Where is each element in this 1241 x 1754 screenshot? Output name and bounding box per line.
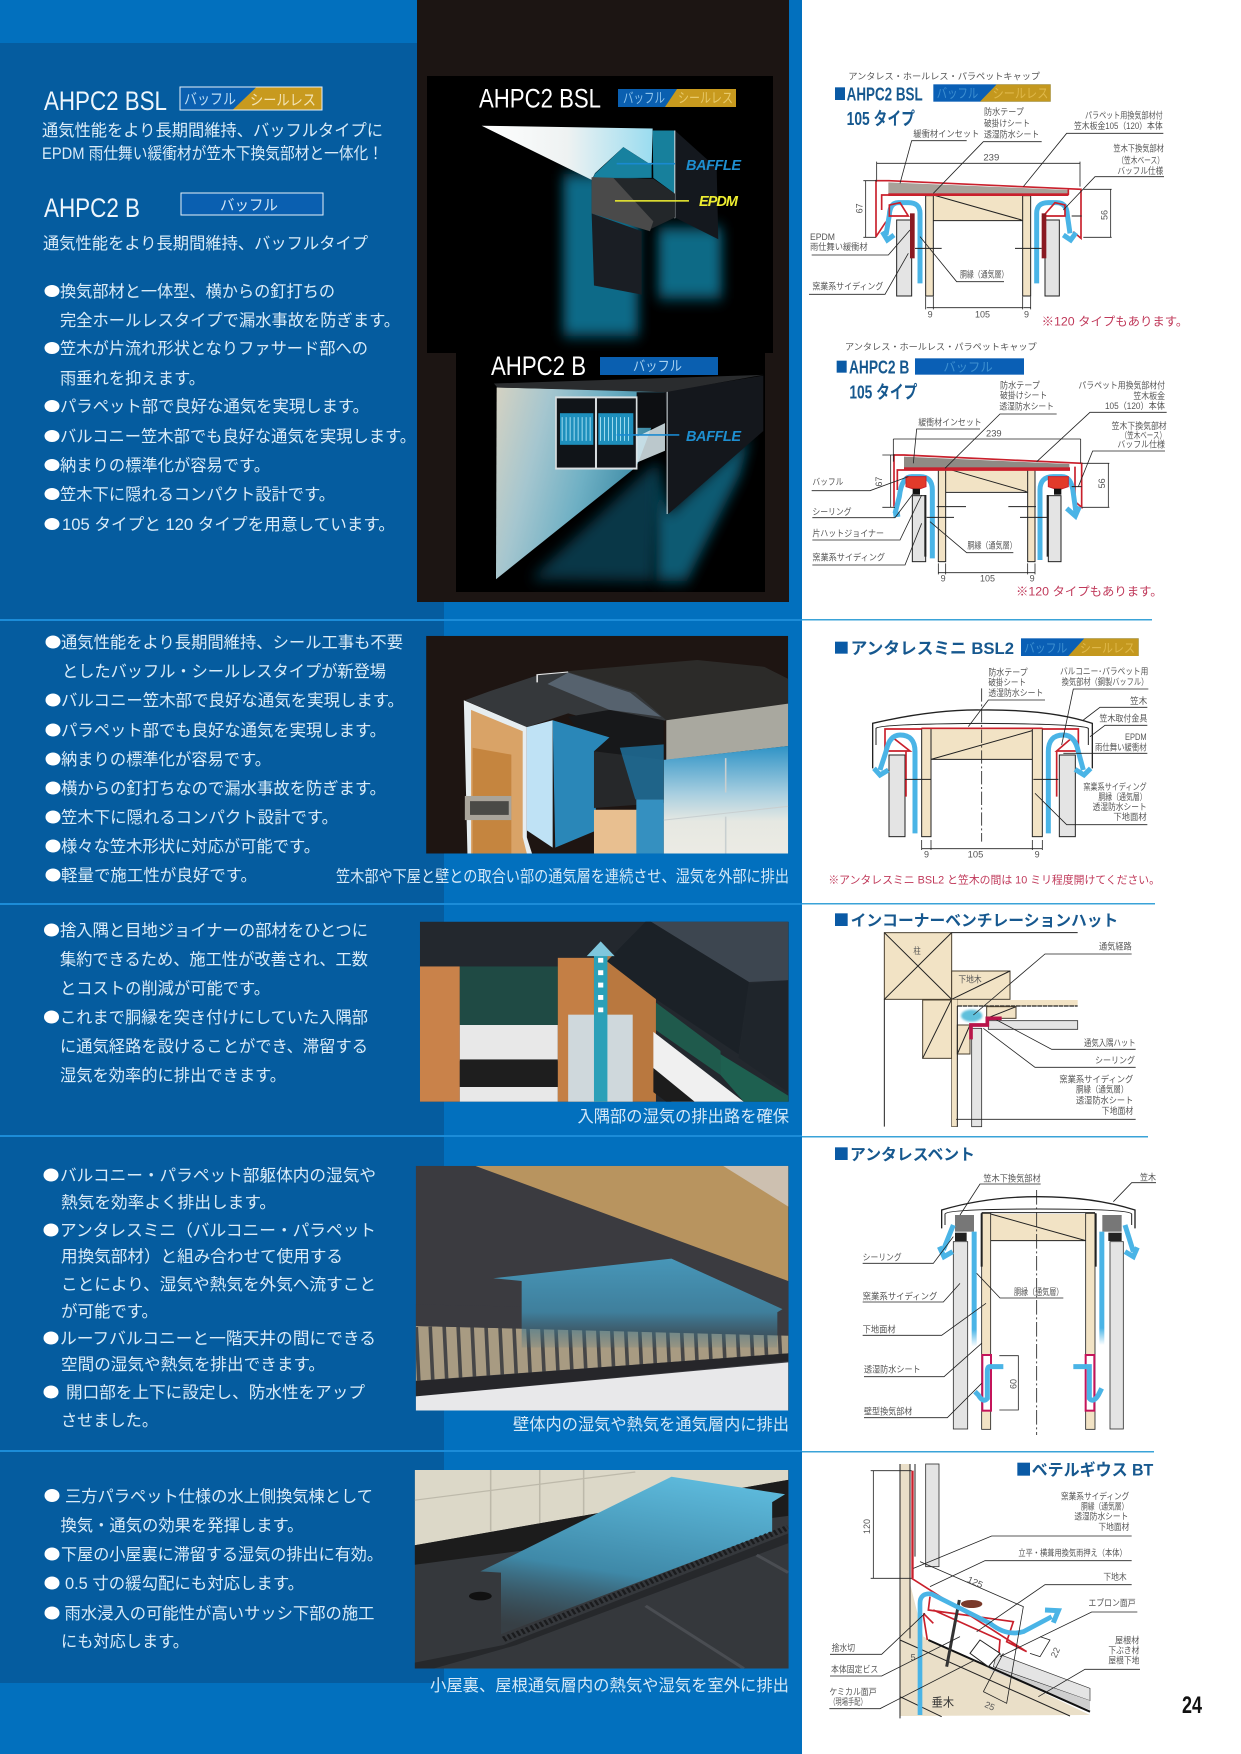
caption: Betelgeuse: 小屋裏、屋根通気層内の熱気や湿気を室外に排出 [430, 1676, 789, 1695]
render: AHPC2 B section [494, 375, 763, 581]
diagram: Antaless Mini BSL2 [828, 638, 1160, 886]
tag: baffle sealless dark: シールレス [678, 90, 733, 106]
diagram: Antaless vent: シーリング [863, 1252, 902, 1263]
diagram: Antaless vent [835, 1146, 1156, 1435]
diagram: Betelgeuse BT: 透湿防水シート [1074, 1510, 1128, 1521]
diagram: AHPC2 B 105 type: 105 [980, 574, 995, 584]
diagram: Antaless Mini BSL2: アンタレスミニ BSL2 [851, 639, 1014, 658]
diagram: Betelgeuse BT: エプロン面戸 [1088, 1598, 1136, 1608]
diagram: Antaless Mini BSL2: 窯業系サイディング [1083, 781, 1147, 792]
diagram: Betelgeuse BT: 22 [1049, 1646, 1062, 1659]
diagram: AHPC2 B 105 type: シーリング [812, 506, 852, 517]
diagram: Betelgeuse BT: 下地木 [1103, 1571, 1127, 1582]
diagram: Betelgeuse BT: 屋根材 [1115, 1634, 1139, 1645]
diagram: AHPC2 BSL 105 type: 56 [1099, 210, 1109, 220]
diagram: Antaless Mini BSL2: バッフル [1024, 641, 1068, 655]
diagram: AHPC2 B 105 type: AHPC2 B [849, 356, 909, 377]
diagram: Antaless Mini BSL2: 9 [1035, 849, 1040, 859]
diagram: Betelgeuse BT: 垂木 [932, 1696, 954, 1710]
list: vent features: 開口部を上下に設定し、防水性をアップ [66, 1383, 366, 1402]
list: corner features: とコストの削減が可能です。 [60, 979, 270, 998]
diagram: AHPC2 B 105 type: 9 [941, 574, 946, 584]
list: AHPC2 features [44, 282, 416, 534]
diagram: In-corner ventilation hat: 下地面材 [1102, 1105, 1133, 1116]
diagram: AHPC2 B 105 type: 67 [874, 477, 884, 487]
list: Betelgeuse features [44, 1487, 383, 1651]
diagram: AHPC2 B 105 type: 笠木下換気部材 [1112, 420, 1167, 431]
diagram: Antaless vent: 笠木下換気部材 [983, 1173, 1041, 1184]
list: AHPC2 features: 納まりの標準化が容易です。 [60, 456, 270, 475]
tag: baffle sealless dark: バッフル [623, 90, 665, 106]
diagram: Antaless vent: 下地面材 [863, 1324, 896, 1335]
list: AHPC2 features: 雨垂れを抑えます。 [60, 369, 205, 388]
diagram: Betelgeuse BT: 屋根下地 [1108, 1654, 1139, 1665]
diagram: AHPC2 B 105 type: （笠木ベース） [1121, 429, 1166, 440]
diagram: Betelgeuse BT: 5 [911, 1653, 916, 1663]
diagram: AHPC2 B 105 type: バッフル [812, 477, 843, 487]
diagram: AHPC2 BSL 105 type: 緩衝材インセット [913, 128, 979, 139]
panel: product renders [417, 0, 789, 602]
diagram: AHPC2 BSL 105 type: AHPC2 BSL [847, 84, 923, 105]
list: vent features: 空間の湿気や熱気を排出できます。 [61, 1355, 325, 1374]
diagram: AHPC2 BSL 105 type: バッフル [937, 86, 978, 101]
diagram: AHPC2 B 105 type: 窯業系サイディング [812, 552, 885, 563]
diagram: In-corner ventilation hat: シーリング [1095, 1054, 1135, 1065]
diagram: AHPC2 BSL 105 type: ※120 タイプもあります。 [1042, 315, 1188, 329]
diagram: AHPC2 B 105 type: 緩衝材インセット [918, 417, 982, 428]
list: AHPC2 features: 105 タイプと 120 タイプを用意しています。 [62, 515, 395, 534]
list: vent features: ルーフバルコニーと一階天井の間にできる [60, 1329, 376, 1348]
tag: baffle sealless: バッフル [184, 91, 236, 108]
section: Betelgeuse text [44, 1470, 789, 1695]
list: AHPC2 features: バルコニー笠木部でも良好な通気を実現します。 [60, 427, 416, 446]
diagram: Betelgeuse BT: 25 [983, 1699, 996, 1713]
label: EPDM: EPDM [699, 194, 739, 210]
diagram: In-corner ventilation hat: 通気入隅ハット [1084, 1037, 1136, 1048]
list: vent features [44, 1166, 376, 1430]
diagram: AHPC2 B 105 type [812, 342, 1167, 599]
diagram: Betelgeuse BT: 125 [966, 1574, 985, 1590]
list: mini features [46, 633, 404, 885]
diagram: Betelgeuse BT: ベテルギウス BT [1032, 1461, 1153, 1480]
heading: AHPC2 BSL: AHPC2 BSL [44, 86, 167, 116]
diagram: AHPC2 B 105 type: 破掛けシート [1000, 389, 1047, 400]
diagram: AHPC2 BSL 105 type: 笠木板金105（120）本体 [1074, 120, 1163, 131]
diagram: In-corner ventilation hat [835, 912, 1136, 1127]
list: AHPC2 features: 笠木下に隠れるコンパクト設計です。 [60, 485, 335, 504]
list: AHPC2 features: 笠木が片流れ形状となりファサード部への [60, 339, 368, 358]
label: baffle: BAFFLE [686, 158, 742, 174]
diagram: AHPC2 BSL 105 type: アンタレス・ホールレス・パラペットキャップ [848, 71, 1040, 81]
diagram: AHPC2 BSL 105 type: 105 [975, 310, 990, 320]
diagram: Antaless Mini BSL2: シールレス [1080, 641, 1135, 655]
photo: parapet cutaway [426, 636, 788, 853]
list: mini features: 笠木下に隠れるコンパクト設計です。 [61, 808, 338, 827]
diagram: Antaless Mini BSL2: 透湿防水シート [988, 687, 1043, 698]
diagram: Antaless vent: 窯業系サイディング [863, 1290, 937, 1301]
diagram: AHPC2 B 105 type: 防水テープ [1000, 379, 1040, 390]
text: BSL description [42, 121, 383, 163]
diagram: Antaless Mini BSL2: 笠木 [1130, 695, 1147, 706]
diagram: Betelgeuse BT: 下ぶき材 [1108, 1644, 1139, 1655]
diagram: AHPC2 BSL 105 type: 雨仕舞い緩衝材 [810, 241, 868, 252]
list: vent features: 熱気を効率よく排出します。 [61, 1193, 276, 1212]
diagram: AHPC2 BSL 105 type [809, 71, 1188, 329]
list: mini features: パラペット部でも良好な通気を実現します。 [61, 721, 386, 740]
diagram: AHPC2 B 105 type: バッフル [943, 360, 993, 374]
diagram: AHPC2 BSL 105 type: 笠木下換気部材 [1113, 143, 1164, 154]
diagram: Betelgeuse BT [829, 1461, 1153, 1718]
list: mini features: バルコニー笠木部で良好な通気を実現します。 [61, 691, 404, 710]
diagram: AHPC2 B 105 type: 透湿防水シート [999, 400, 1054, 411]
diagram: Betelgeuse BT: 捨水切 [832, 1642, 855, 1653]
diagram: Antaless vent: 笠木 [1140, 1172, 1156, 1183]
list: vent features: させました。 [61, 1411, 158, 1430]
diagram: In-corner ventilation hat: 胴縁（通気層） [1076, 1084, 1128, 1095]
list: Betelgeuse features: 雨水浸入の可能性が高いサッシ下部の施工 [64, 1604, 374, 1623]
diagram: Antaless vent: 60 [1009, 1379, 1019, 1389]
list: mini features: としたバッフル・シールレスタイプが新登場 [62, 662, 386, 681]
diagram: Antaless Mini BSL2: 防水テープ [988, 667, 1028, 678]
diagram: Antaless Mini BSL2: 破掛シート [988, 677, 1026, 688]
list: corner features: 湿気を効率的に排出できます。 [60, 1066, 286, 1085]
diagram: In-corner ventilation hat: 柱 [913, 945, 921, 956]
list: Betelgeuse features: にも対応します。 [61, 1632, 189, 1651]
diagram: AHPC2 BSL 105 type: 105 タイプ [847, 108, 915, 129]
tag: baffle sealless dark [618, 89, 736, 107]
list: vent features: が可能です。 [61, 1302, 158, 1321]
section: Antaless Mini text [46, 633, 789, 886]
diagram: AHPC2 BSL 105 type: 破掛けシート [984, 118, 1030, 129]
diagram: In-corner ventilation hat: 透湿防水シート [1076, 1094, 1133, 1105]
diagram: AHPC2 B 105 type: 片ハットジョイナー [812, 528, 884, 539]
list: Betelgeuse features: 0.5 寸の緩勾配にも対応します。 [65, 1574, 304, 1593]
list: corner features: に通気経路を設けることができ、滞留する [60, 1037, 368, 1056]
diagram: Antaless Mini BSL2: 笠木取付金具 [1099, 713, 1147, 724]
list: vent features: バルコニー・パラペット部躯体内の湿気や [60, 1166, 376, 1185]
diagram: Antaless Mini BSL2: 105 [968, 849, 983, 859]
diagram: Betelgeuse BT: 120 [862, 1519, 872, 1534]
diagram: Antaless Mini BSL2: 透湿防水シート [1093, 801, 1147, 812]
diagram: In-corner ventilation hat: 下地木 [958, 973, 982, 984]
diagram: AHPC2 BSL 105 type: 67 [854, 203, 864, 213]
tag: baffle dark [600, 357, 718, 375]
list: AHPC2 features: 完全ホールレスタイプで漏水事故を防ぎます。 [60, 311, 400, 330]
tag: baffle sealless [180, 87, 322, 110]
section: Antaless vent text [44, 1166, 789, 1434]
page number: 24 [1182, 1692, 1202, 1719]
list: vent features: 用換気部材）と組み合わせて使用する [61, 1247, 343, 1266]
diagram: AHPC2 B 105 type: 56 [1097, 478, 1107, 488]
list: Betelgeuse features: 下屋の小屋裏に滞留する湿気の排出に有効。 [61, 1545, 383, 1564]
diagram: Antaless Mini BSL2: EPDM [1125, 732, 1147, 742]
list: mini features: 様々な笠木形状に対応が可能です。 [61, 837, 320, 856]
section: corner vent text [44, 921, 789, 1126]
list: mini features: 納まりの標準化が容易です。 [61, 750, 271, 769]
diagram: AHPC2 BSL 105 type: 胴縁（通気層） [960, 268, 1008, 279]
diagram: AHPC2 B 105 type: 105 タイプ [849, 381, 917, 402]
diagram: Antaless Mini BSL2: 雨仕舞い緩衝材 [1095, 742, 1147, 753]
caption: mini: 笠木部や下屋と壁との取合い部の通気層を連続させ、湿気を外部に排出 [336, 867, 789, 886]
photo: vent close-up [416, 1166, 789, 1411]
diagram: In-corner ventilation hat: インコーナーベンチレーションハット [851, 912, 1118, 930]
list: mini features: 横からの釘打ちなので漏水事故を防ぎます。 [61, 779, 386, 798]
diagram: Betelgeuse BT: 胴縁（通気層） [1081, 1500, 1128, 1511]
diagram: AHPC2 BSL 105 type: EPDM [810, 232, 835, 242]
diagram: Antaless Mini BSL2: ※アンタレスミニ BSL2 と笠木の間は 10 ミリ程度開けてください。 [828, 872, 1160, 886]
list: vent features: ことにより、湿気や熱気を外気へ流すこと [61, 1275, 376, 1294]
diagram: Antaless vent: 壁型換気部材 [864, 1406, 912, 1417]
diagram: Betelgeuse BT: 下地面材 [1098, 1521, 1129, 1532]
list: AHPC2 features: 換気部材と一体型、横からの釘打ちの [60, 282, 335, 301]
diagram: AHPC2 B 105 type: 胴縁（通気層） [967, 539, 1017, 550]
label: AHPC2 BSL title: AHPC2 BSL [479, 84, 601, 114]
list: mini features: 通気性能をより長期間維持、シール工事も不要 [61, 633, 403, 652]
diagram: AHPC2 BSL 105 type: 透湿防水シート [984, 129, 1039, 140]
diagram: AHPC2 BSL 105 type: 9 [928, 310, 933, 320]
diagram: Betelgeuse BT: ケミカル面戸 [829, 1687, 877, 1697]
diagram: Betelgeuse BT: 立平・横葺用換気雨押え（本体） [1018, 1547, 1127, 1558]
diagram: AHPC2 B 105 type: 105（120）本体 [1105, 400, 1165, 411]
diagram: Antaless vent: アンタレスベント [850, 1146, 975, 1164]
list: mini features: 軽量で施工性が良好です。 [61, 866, 257, 885]
diagram: Antaless vent: 胴縁（通気層） [1014, 1286, 1063, 1297]
list: corner features: 集約できるため、施工性が改善され、工数 [60, 950, 368, 969]
tag: baffle dark: バッフル [633, 358, 682, 374]
diagram: AHPC2 B 105 type: パラペット用換気部材付 [1078, 379, 1165, 390]
diagram: In-corner ventilation hat: 窯業系サイディング [1059, 1074, 1133, 1085]
list: Betelgeuse features: 換気・通気の効果を発揮します。 [60, 1516, 304, 1535]
text: BSL description: EPDM 雨仕舞い緩衝材が笠木下換気部材と一体化！ [42, 144, 383, 163]
photo: inner corner [420, 922, 789, 1102]
diagram: AHPC2 B 105 type: ※120 タイプもあります。 [1016, 585, 1163, 599]
diagram: Antaless Mini BSL2: 9 [924, 849, 929, 859]
render: AHPC2 BSL section [482, 126, 722, 336]
diagram: Antaless Mini BSL2: 換気部材（鋼製バッフル） [1062, 676, 1148, 687]
list: corner features: これまで胴縁を突き付けにしていた入隅部 [60, 1008, 368, 1027]
list: vent features: アンタレスミニ（バルコニー・パラペット [60, 1221, 376, 1240]
diagram: Antaless vent: 透湿防水シート [864, 1364, 921, 1375]
tag: baffle [181, 193, 323, 215]
diagram: Betelgeuse BT: 窯業系サイディング [1061, 1490, 1129, 1501]
photo: roof vent [415, 1470, 789, 1669]
diagram: AHPC2 B 105 type: アンタレス・ホールレス・パラペットキャップ [845, 342, 1037, 352]
diagram: AHPC2 B 105 type: バッフル仕様 [1117, 439, 1165, 450]
diagram: Antaless Mini BSL2: 下地面材 [1113, 811, 1147, 822]
caption: vent: 壁体内の湿気や熱気を通気層内に排出 [513, 1415, 789, 1434]
diagram: AHPC2 B 105 type: 239 [986, 429, 1002, 439]
caption: corner: 入隅部の湿気の排出路を確保 [578, 1107, 789, 1126]
text: BSL description: 通気性能をより長期間維持、バッフルタイプに [42, 121, 383, 140]
diagram: Betelgeuse BT: （現場手配） [829, 1696, 867, 1707]
diagram: AHPC2 BSL 105 type: （笠木ベース） [1117, 154, 1164, 165]
list: corner features: 捨入隅と目地ジョイナーの部材をひとつに [60, 921, 368, 940]
diagram: Antaless Mini BSL2: 胴縁（通気層） [1098, 791, 1147, 802]
diagram: AHPC2 BSL 105 type: シールレス [993, 86, 1048, 101]
diagram: AHPC2 B 105 type: 笠木板金 [1133, 390, 1165, 401]
diagram: AHPC2 BSL 105 type: 窯業系サイディング [812, 280, 883, 291]
tag: baffle sealless: シールレス [250, 92, 316, 109]
diagram: AHPC2 BSL 105 type: 9 [1024, 310, 1029, 320]
list: AHPC2 features: パラペット部で良好な通気を実現します。 [60, 397, 369, 416]
diagram: In-corner ventilation hat: 通気経路 [1099, 940, 1132, 951]
diagram: AHPC2 BSL 105 type: パラペット用換気部材付 [1085, 109, 1163, 120]
text: B description: 通気性能をより長期間維持、バッフルタイプ [43, 234, 368, 253]
diagram: Antaless Mini BSL2: バルコニー･パラペット用 [1060, 666, 1148, 676]
list: Betelgeuse features: 三方パラペット仕様の水上側換気棟として [65, 1487, 373, 1506]
diagram: AHPC2 BSL 105 type: バッフル仕様 [1117, 165, 1163, 176]
diagram: AHPC2 B 105 type: 9 [1030, 574, 1035, 584]
diagram: AHPC2 BSL 105 type: 239 [983, 153, 999, 163]
heading: AHPC2 B: AHPC2 B [44, 193, 140, 223]
panel: AHPC2 intro text [42, 86, 416, 534]
list: corner features [44, 921, 368, 1085]
tag: baffle: バッフル [220, 197, 278, 214]
label: baffle lower: BAFFLE [686, 429, 742, 445]
diagram: AHPC2 BSL 105 type: 防水テープ [984, 106, 1024, 117]
label: AHPC2 B title: AHPC2 B [491, 351, 586, 381]
diagram: Betelgeuse BT: 本体固定ビス [831, 1663, 878, 1674]
